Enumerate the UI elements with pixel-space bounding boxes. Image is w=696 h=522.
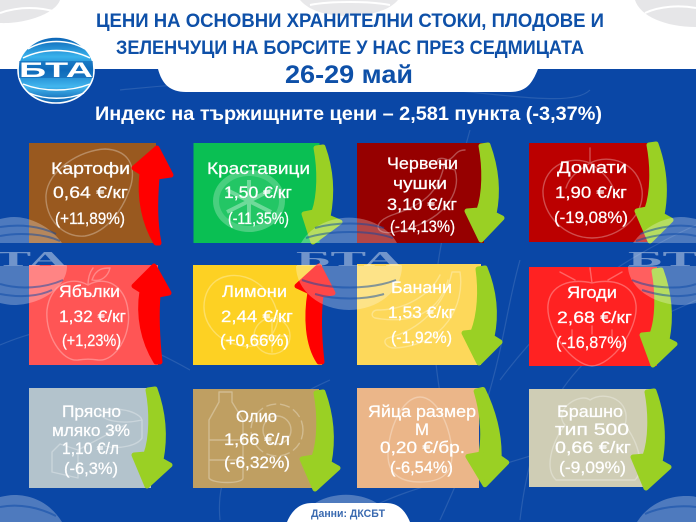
text: potatoes: 0,64 €/кг [53, 183, 128, 202]
arrow: apples up [134, 266, 169, 362]
text: oil [224, 407, 290, 472]
text: eggs [368, 402, 476, 477]
panel: oil [193, 389, 319, 488]
watermark: right globe [628, 217, 696, 305]
panel: lemons [193, 265, 322, 365]
text: bananas: (-1,92%) [391, 328, 452, 347]
watermark: centre globe [296, 218, 404, 310]
icon: tomato [543, 148, 642, 238]
text: eggs: 0,20 €/бр. [380, 438, 465, 457]
text: bananas [388, 278, 455, 347]
arrow: eggs down [461, 388, 509, 486]
text: apples: (+1,23%) [62, 331, 121, 350]
text: milk [52, 402, 130, 478]
watermark: centre globe: БТА [296, 247, 404, 271]
text: peppers: Червени [387, 154, 458, 173]
watermark: left globe [0, 217, 69, 305]
icon: cucumber slice [213, 170, 285, 232]
icon: egg [388, 397, 452, 482]
icon: apple [47, 268, 129, 360]
text: oil: (-6,32%) [224, 453, 290, 472]
text: tomatoes [554, 158, 628, 227]
arrow: milk down [134, 389, 170, 486]
text: lemons: 2,44 €/кг [221, 307, 293, 326]
text: apples [59, 282, 126, 350]
title: ЦЕНИ НА ОСНОВНИ ХРАНИТЕЛНИ СТОКИ, ПЛОДОВЕ И [96, 11, 604, 32]
arrow: potatoes up [134, 148, 171, 243]
index subtitle: Индекс на тържищните цени – 2,581 пункта (-3,37%) [95, 104, 602, 125]
arrow: strawberries down [642, 270, 675, 365]
title [96, 11, 604, 59]
text: cucumbers [207, 159, 310, 228]
text: flour [555, 402, 631, 477]
panel: apples [29, 265, 158, 365]
header white band [0, 0, 696, 92]
text: eggs: М [415, 420, 429, 439]
text: peppers: (-14,13%) [390, 217, 455, 236]
icon: bananas [372, 272, 461, 348]
text: flour: (-9,09%) [559, 458, 626, 477]
panel: potatoes [29, 143, 156, 243]
panel: milk [29, 388, 151, 488]
text: flour: Брашно [557, 402, 623, 421]
panel: red peppers [357, 143, 484, 243]
arrow: flour down [633, 391, 669, 488]
header watermarks [0, 0, 696, 27]
icon: cheese and milk [52, 409, 142, 478]
arrow: cucumbers down [304, 147, 340, 242]
text: flour: тип 500 [555, 420, 629, 439]
arrow: oil down [302, 392, 338, 489]
text: lemons: (+0,66%) [220, 331, 289, 350]
icon: strawberry [548, 268, 636, 366]
text: potatoes: Картофи [51, 159, 130, 178]
date: 26-29 май [285, 61, 413, 89]
text: cucumbers: 1,50 €/кг [224, 183, 292, 202]
text: peppers: чушки [393, 174, 447, 193]
text: apples: Ябълки [59, 282, 120, 301]
icon: potato [46, 149, 132, 236]
text: bananas: Банани [391, 278, 452, 297]
text: peppers [387, 154, 458, 236]
icon: flour sack [550, 396, 640, 480]
text: flour: 0,66 €/кг [555, 438, 631, 457]
watermark: right globe: БТА [628, 247, 696, 271]
text: tomatoes: 1,90 €/кг [555, 183, 627, 202]
panel: strawberries [529, 267, 657, 366]
text: milk: мляко 3% [52, 421, 130, 440]
watermark: bottom globes [0, 495, 696, 522]
text: oil: Олио [236, 407, 277, 426]
panel: bananas [357, 264, 481, 365]
panel: cucumbers [194, 143, 320, 243]
logo: BTA globe [18, 37, 94, 103]
icon: lemon [204, 275, 290, 354]
icon: pepper [378, 150, 465, 233]
text: tomatoes: (-19,08%) [554, 208, 628, 227]
arrow: bananas down [464, 268, 500, 363]
text: milk: Прясно [62, 402, 121, 421]
text: strawberries: 2,68 €/кг [557, 308, 632, 327]
text: potatoes: (+11,89%) [55, 209, 125, 228]
text: strawberries [556, 283, 632, 352]
arrow: peppers down [467, 145, 502, 240]
text: cucumbers: (-11,35%) [228, 209, 289, 228]
source tab [287, 503, 410, 522]
text: milk: 1,10 €/л [62, 439, 119, 458]
arrow: tomatoes down [637, 144, 671, 241]
panel: tomatoes [529, 143, 653, 242]
panel: flour [529, 389, 651, 487]
text: cucumbers: Краставици [207, 159, 310, 178]
text: bananas: 1,53 €/кг [388, 303, 455, 322]
text: eggs: Яйца размер [368, 402, 476, 421]
logo: BTA globe: БТА [19, 59, 93, 82]
panel: eggs [357, 388, 479, 488]
text: peppers: 3,10 €/кг [387, 195, 457, 214]
text: eggs: (-6,54%) [390, 458, 453, 477]
text: tomatoes: Домати [557, 158, 627, 177]
text: strawberries: (-16,87%) [556, 333, 627, 352]
text: lemons: Лимони [222, 282, 287, 301]
text: milk: (-6,3%) [64, 459, 118, 478]
arrow: lemons up [297, 266, 333, 362]
text: potatoes [51, 159, 130, 228]
text: strawberries: Ягоди [567, 283, 617, 302]
source tab: Данни: ДКСБТ [311, 508, 385, 520]
title: ЗЕЛЕНЧУЦИ НА БОРСИТЕ У НАС ПРЕЗ СЕДМИЦАТА [116, 38, 584, 59]
text: oil: 1,66 €/л [224, 430, 290, 449]
text: apples: 1,32 €/кг [59, 307, 126, 326]
icon: oil bottle and sunflower [209, 392, 303, 482]
text: lemons [220, 282, 293, 350]
